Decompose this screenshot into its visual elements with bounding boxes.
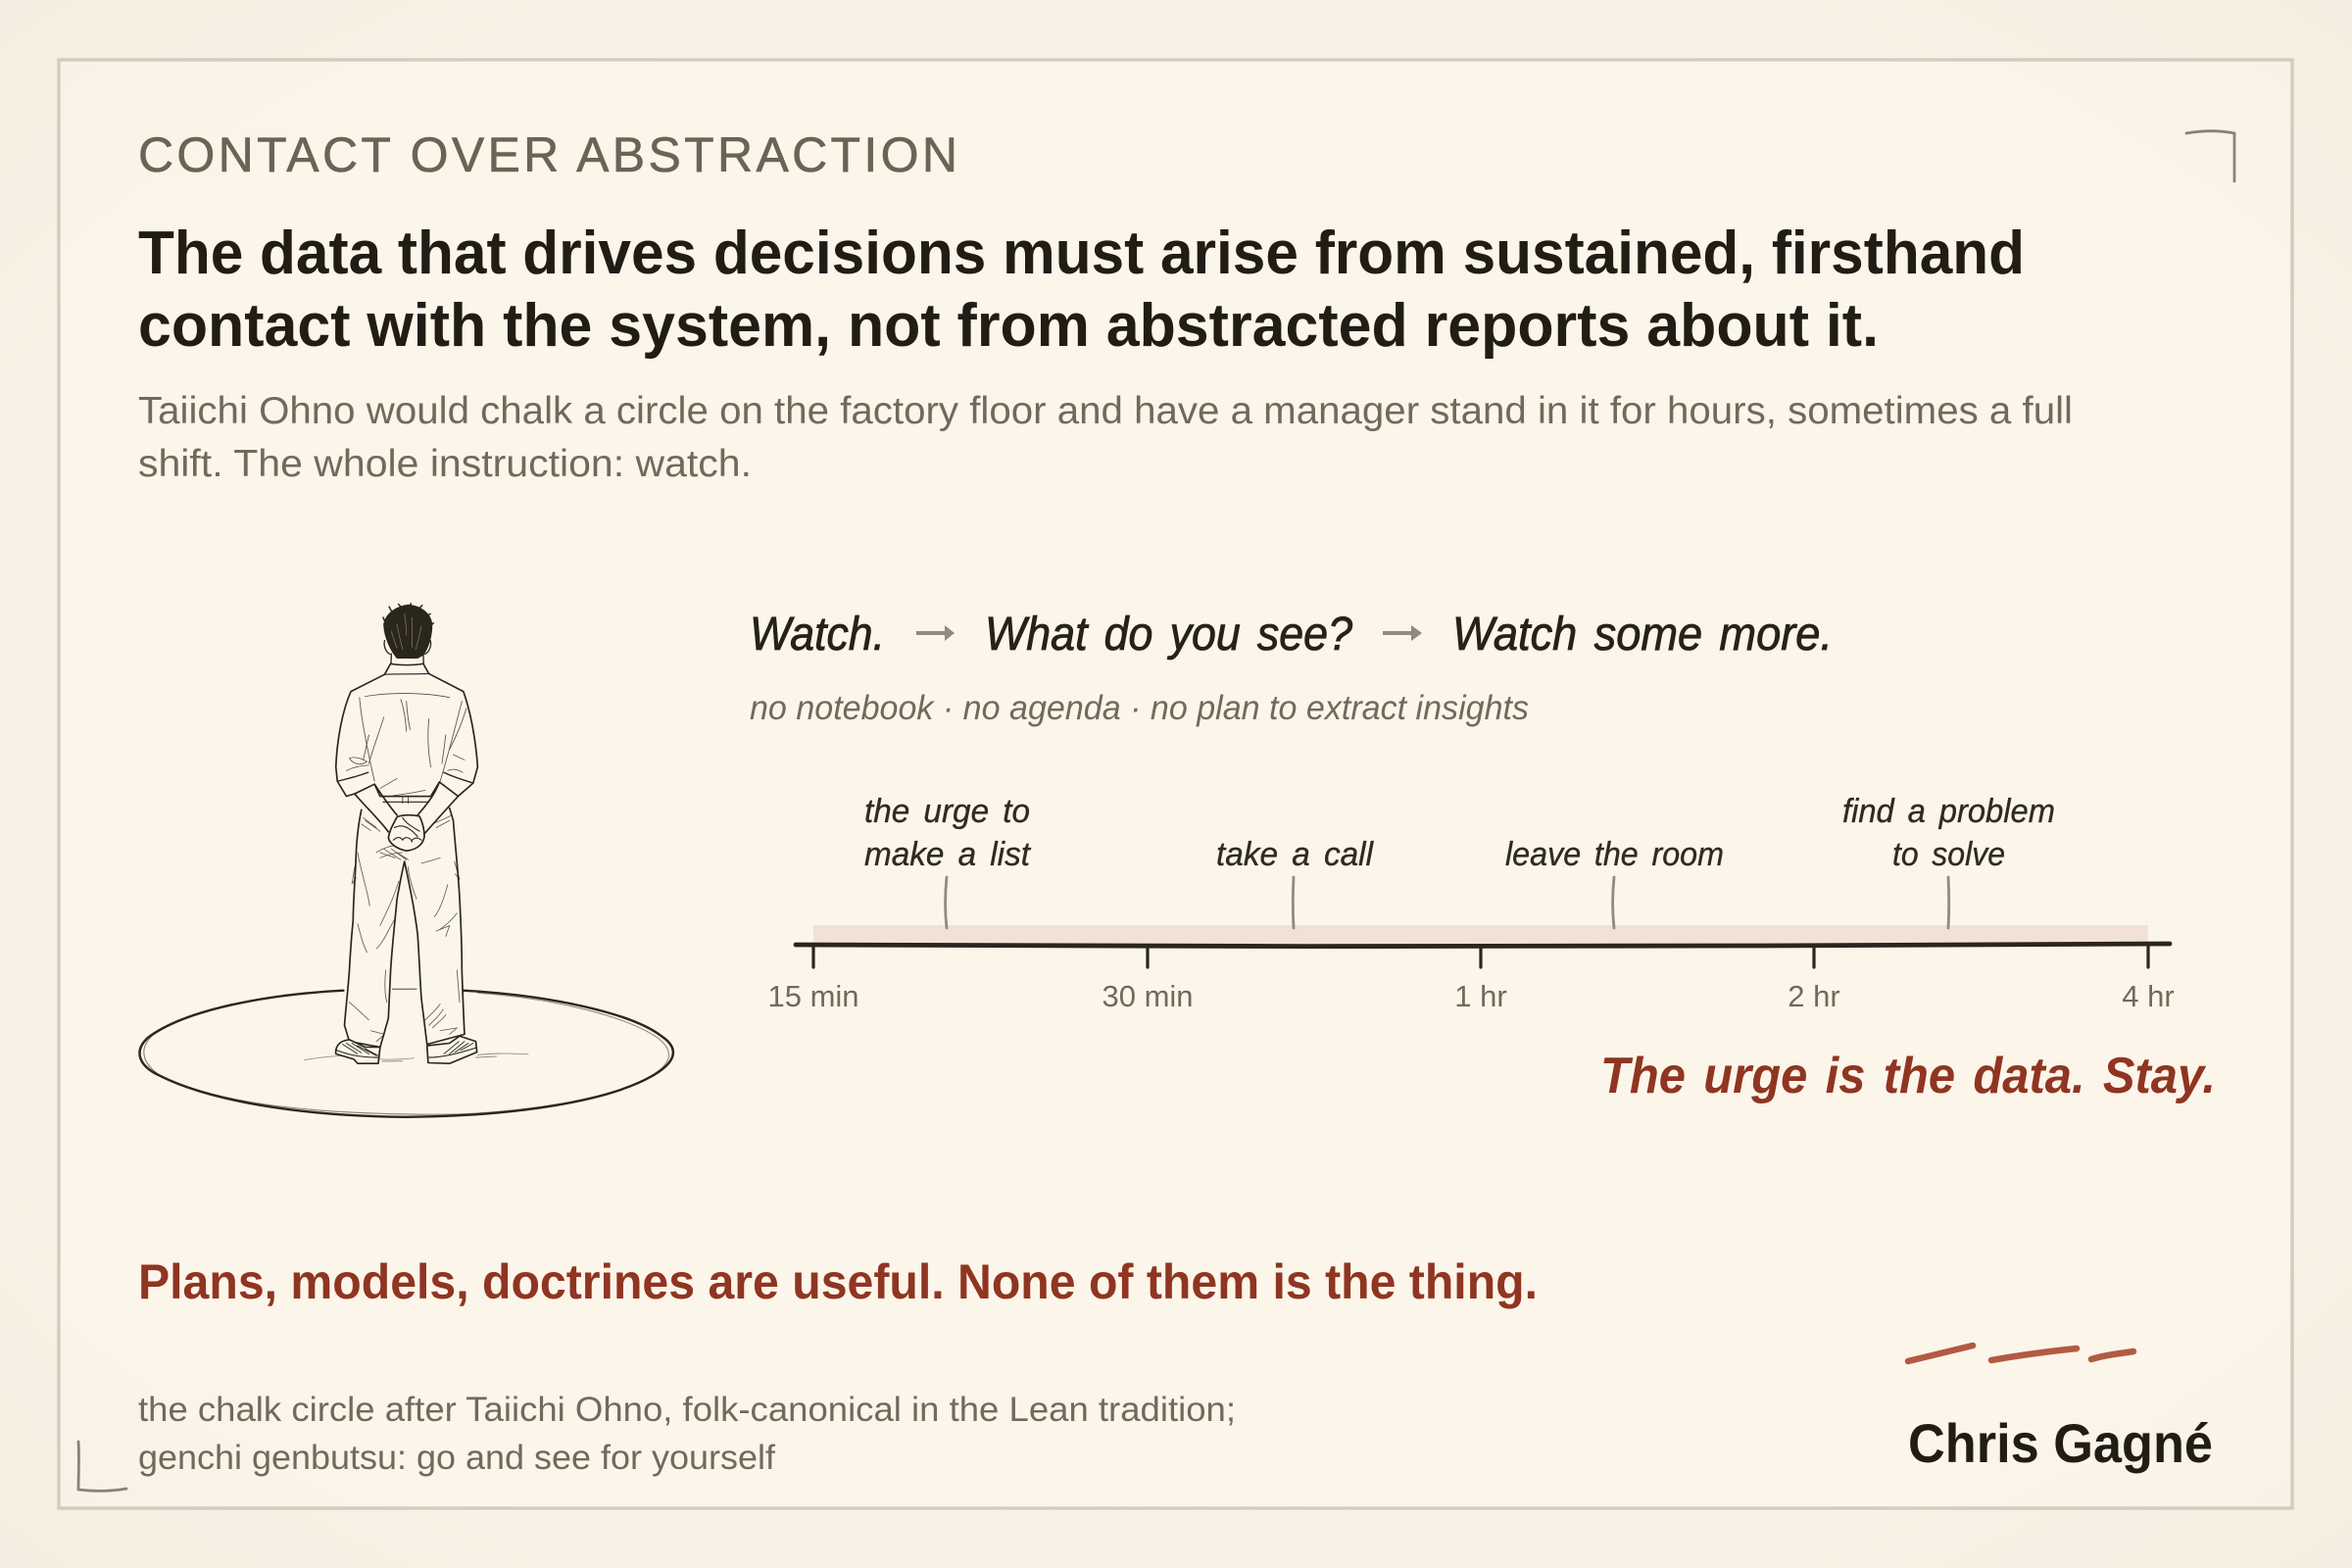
author name: Chris Gagné [1908,1412,2213,1474]
title: The data that drives decisions must arise from sustained, firsthand [138,220,2025,287]
trousers [345,808,465,1047]
flow: Watch sequence: Watch some more. [1452,609,1833,661]
subtitle: Taiichi Ohno would chalk a circle on the factory floor and have a manager stand in it for hours, sometimes a full [138,390,2073,432]
caption: no notebook: no notebook · no agenda · no plan to extract insights [750,689,1529,727]
shirt details [346,694,466,796]
cuffs [337,772,473,783]
corner mark: top right [2186,131,2234,181]
timeline tick labels [767,979,2175,1013]
timeline tick labels: 4 hr [2122,979,2175,1013]
footnote: the chalk circle after Taiichi Ohno, folk-canonical in the Lean tradition; [138,1391,1236,1429]
callout: the urge is the data: The urge is the data. Stay. [1600,1048,2216,1104]
subtitle [138,390,2073,485]
urge labels: take a call [1216,836,1374,873]
belt [380,797,431,804]
timeline tick labels: 30 min [1102,979,1194,1013]
timeline chart [767,793,2175,1013]
arrow: watch to see [916,625,955,641]
timeline tick labels: 15 min [767,979,859,1013]
urge leader lines [945,877,1949,928]
timeline axis [796,944,2170,947]
footnote: genchi genbutsu: go and see for yourself [138,1439,775,1477]
urge labels: find a problem [1842,793,2055,830]
timeline ticks [813,947,2148,967]
floor shadows [305,1054,528,1061]
flow: Watch sequence: Watch. [750,609,885,661]
arrow: see to watch [1383,625,1422,641]
timeline tick labels: 2 hr [1788,979,1840,1013]
shirt [336,663,477,797]
hair [383,604,433,658]
timeline band [813,925,2148,945]
neck and ears [384,641,431,663]
eyebrow heading: CONTACT OVER ABSTRACTION [138,127,957,182]
illustration: man standing in chalk circle [139,604,673,1117]
urge labels: to solve [1892,836,2005,873]
urge labels: the urge to [864,793,1030,830]
forearms [355,782,458,833]
flow: Watch sequence [750,609,1833,661]
takeaway line: Plans, models, doctrines are useful. None of them is the thing. [138,1254,1538,1309]
timeline tick labels: 1 hr [1454,979,1507,1013]
subtitle: shift. The whole instruction: watch. [138,443,752,485]
boots [336,1036,477,1063]
urge labels: make a list [864,836,1032,873]
title: contact with the system, not from abstracted reports about it. [138,292,1879,360]
urge labels: leave the room [1505,836,1724,873]
flow: Watch sequence: What do you see? [985,609,1352,661]
signature strokes [1908,1346,2133,1361]
title [138,220,2025,360]
corner mark: bottom left [78,1442,126,1491]
hands [388,815,424,851]
trouser folds [350,815,460,1042]
footnote [138,1391,1236,1477]
urge labels [864,793,2055,873]
chalk circle [139,989,673,1117]
